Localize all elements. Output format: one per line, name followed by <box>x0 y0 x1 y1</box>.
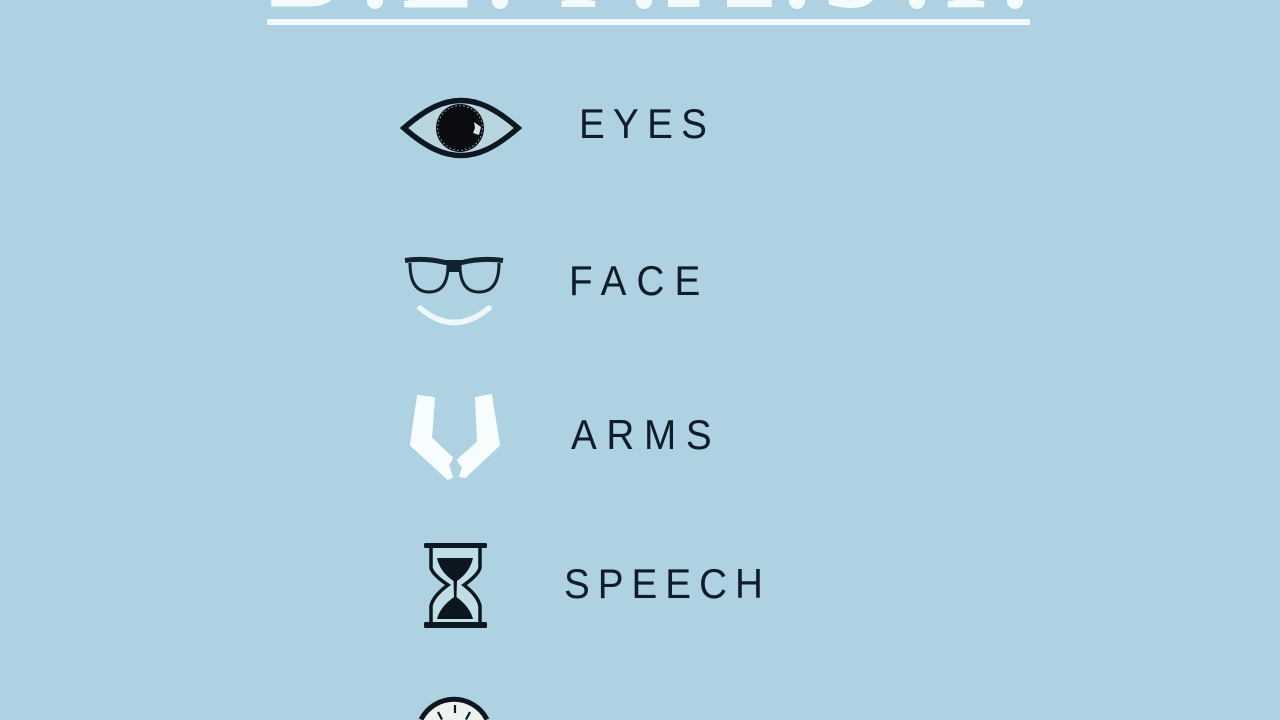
title: B.E.F.A.S.T. cropped at top edge <box>271 0 1023 36</box>
icon: clock cropped at bottom edge <box>421 699 487 720</box>
icon: glasses and smile <box>405 259 503 322</box>
row: eyes <box>404 99 715 156</box>
icon: hourglass <box>424 543 487 628</box>
label: arms: ARMS <box>571 410 721 458</box>
row: arms <box>411 395 721 479</box>
icon: arms <box>411 395 499 479</box>
row: face <box>405 256 710 322</box>
label: eyes: EYES <box>579 99 715 147</box>
row: speech <box>424 543 771 628</box>
icon: eye <box>404 100 518 156</box>
title underline <box>267 19 1030 25</box>
label: speech: SPEECH <box>564 559 771 607</box>
label: face: FACE <box>569 256 710 304</box>
